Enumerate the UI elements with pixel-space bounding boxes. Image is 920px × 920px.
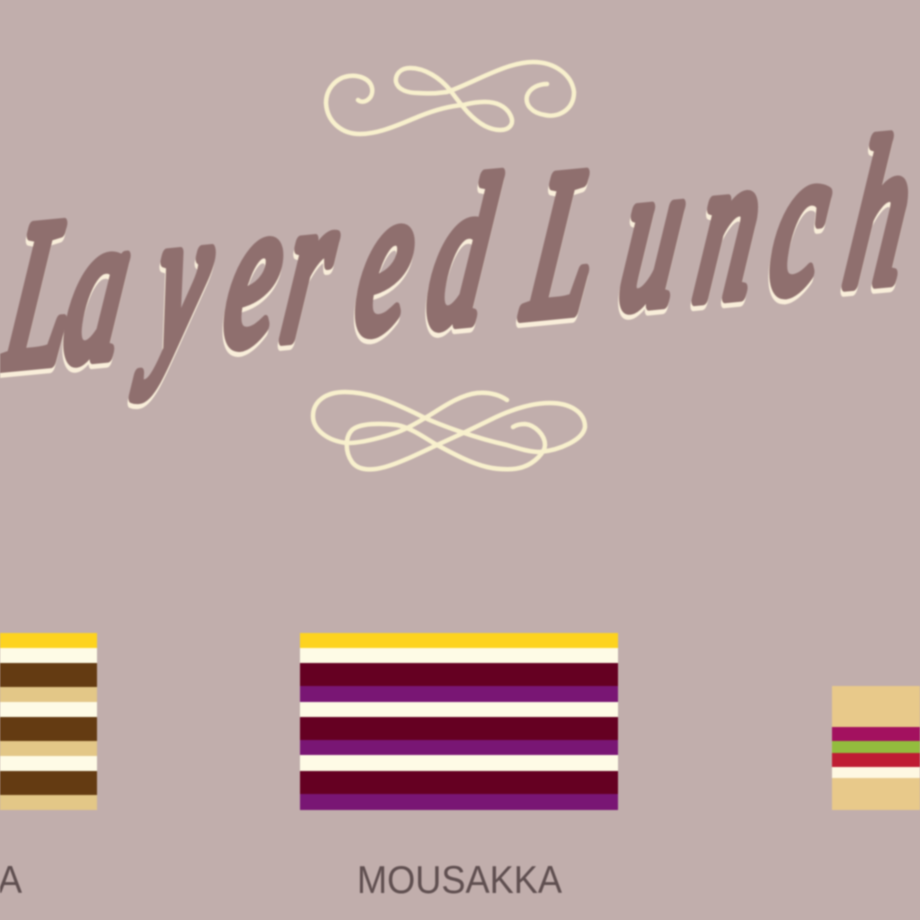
ornament: top flourish [326, 62, 574, 134]
layered bar: lasagna [0, 633, 97, 810]
layered bar: mousakka [300, 633, 618, 810]
label: mousakka: MOUSAKKA [357, 859, 562, 902]
layered bar: sandwich [832, 686, 920, 810]
title: Layered Lunch: Layered Lunch [0, 93, 920, 412]
ornament: bottom flourish [313, 392, 585, 469]
